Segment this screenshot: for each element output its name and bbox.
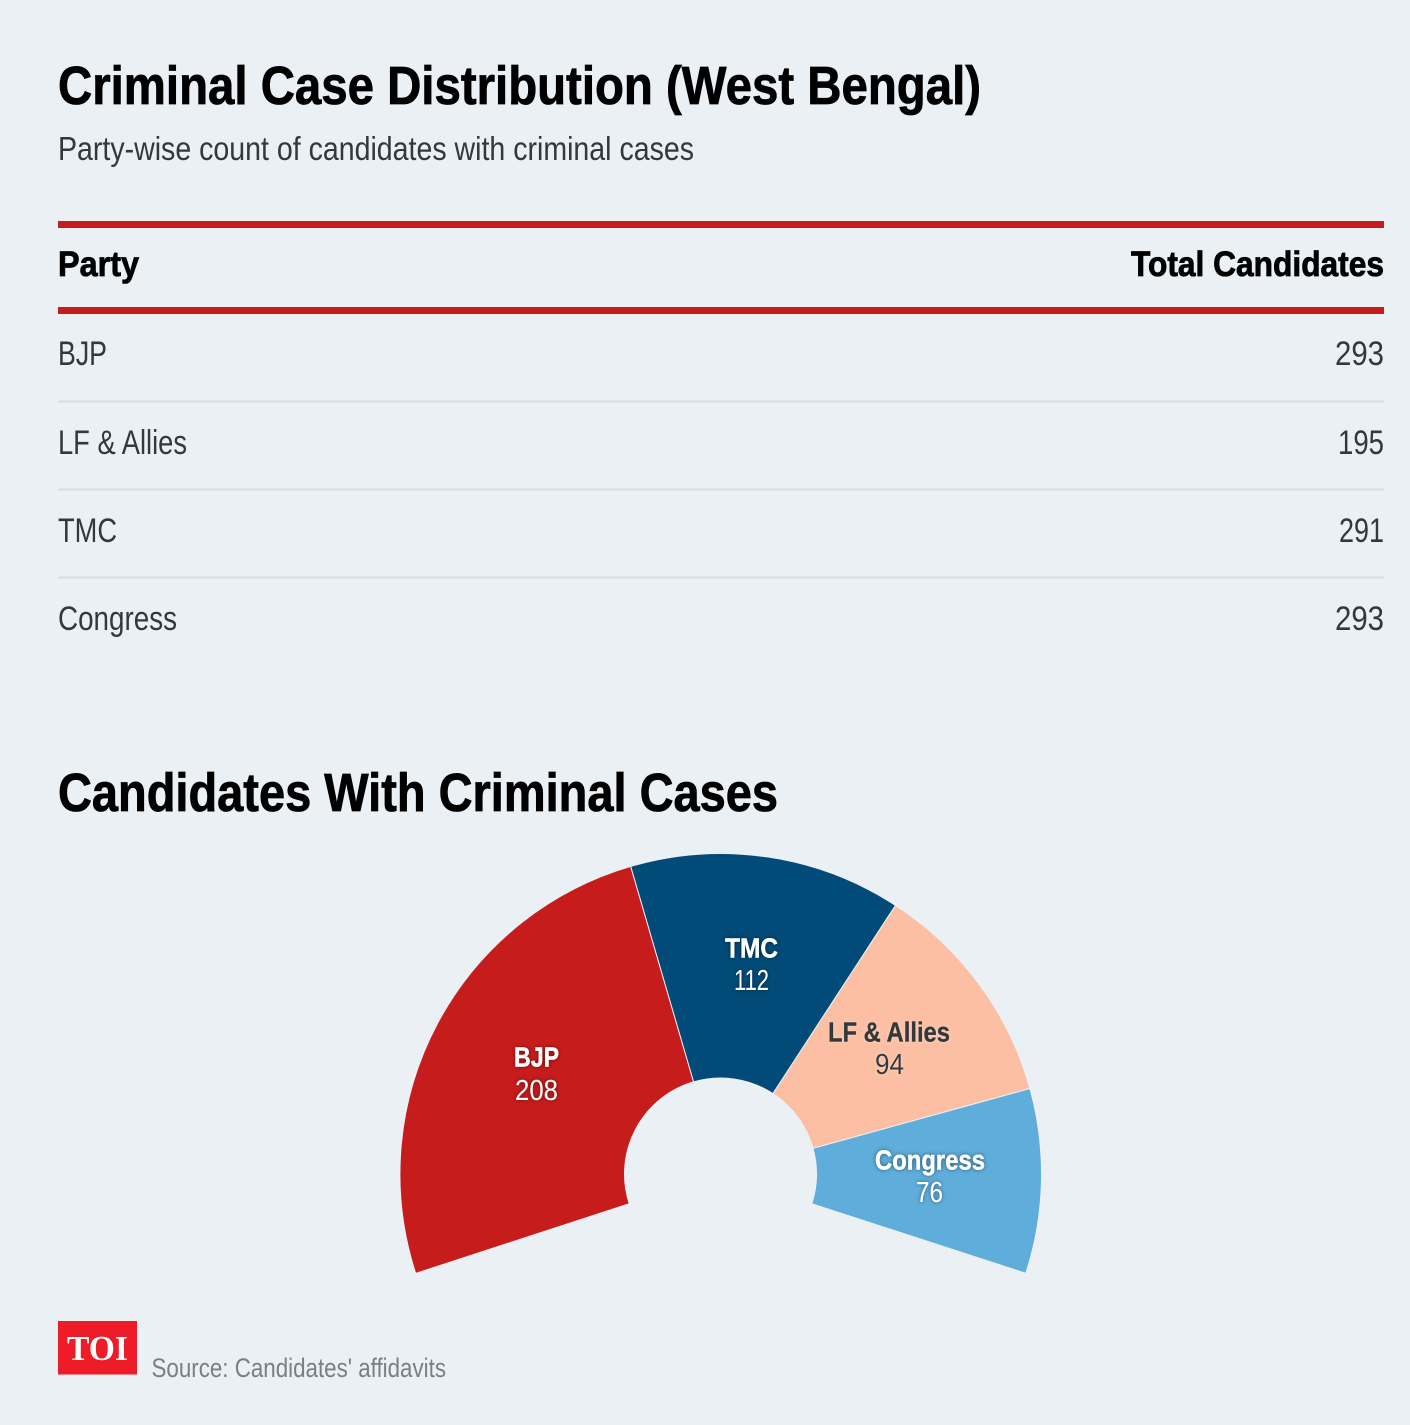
logo: TOI bbox=[58, 1321, 137, 1374]
row: TMC: 291 bbox=[1339, 512, 1384, 550]
segment: LF & Allies bbox=[773, 905, 1030, 1148]
row: TMC bbox=[58, 512, 1384, 550]
segment: LF & Allies: LF & Allies bbox=[828, 1016, 950, 1048]
row: BJP: 293 bbox=[1335, 335, 1384, 373]
row: TMC: TMC bbox=[58, 512, 117, 550]
row: LF & Allies: LF & Allies bbox=[58, 424, 187, 462]
segment: BJP bbox=[400, 866, 694, 1273]
segment: TMC: TMC bbox=[725, 932, 778, 964]
source note: Source: Candidates' affidavits bbox=[152, 1353, 446, 1383]
segment: TMC bbox=[631, 854, 896, 1094]
row: Congress: Congress bbox=[58, 600, 177, 638]
segment: Congress: Congress bbox=[875, 1144, 985, 1176]
segment: Congress: 76 bbox=[916, 1177, 943, 1209]
row: LF & Allies: 195 bbox=[1338, 424, 1384, 462]
segment: LF & Allies: 94 bbox=[875, 1049, 904, 1081]
subtitle: Party-wise count of candidates with criminal cases bbox=[58, 130, 694, 167]
row: BJP: BJP bbox=[58, 335, 107, 373]
segment: Congress bbox=[812, 1088, 1042, 1273]
semi-donut chart bbox=[400, 854, 1042, 1273]
logo: TOI: TOI bbox=[67, 1329, 128, 1368]
segment: TMC: 112 bbox=[734, 965, 769, 997]
row: Congress bbox=[58, 600, 1384, 638]
title: Criminal Case Distribution (West Bengal) bbox=[58, 56, 981, 116]
segment: BJP: 208 bbox=[515, 1075, 558, 1107]
row: LF & Allies bbox=[58, 424, 1384, 462]
segment: BJP: BJP bbox=[514, 1042, 559, 1072]
row: Congress: 293 bbox=[1335, 600, 1384, 638]
table: party-wise total candidates bbox=[58, 221, 1384, 638]
row: BJP bbox=[58, 335, 1384, 373]
table header: party: Party bbox=[58, 245, 139, 284]
chart heading: Candidates With Criminal Cases bbox=[58, 763, 778, 823]
table header: total candidates: Total Candidates bbox=[1131, 245, 1384, 284]
